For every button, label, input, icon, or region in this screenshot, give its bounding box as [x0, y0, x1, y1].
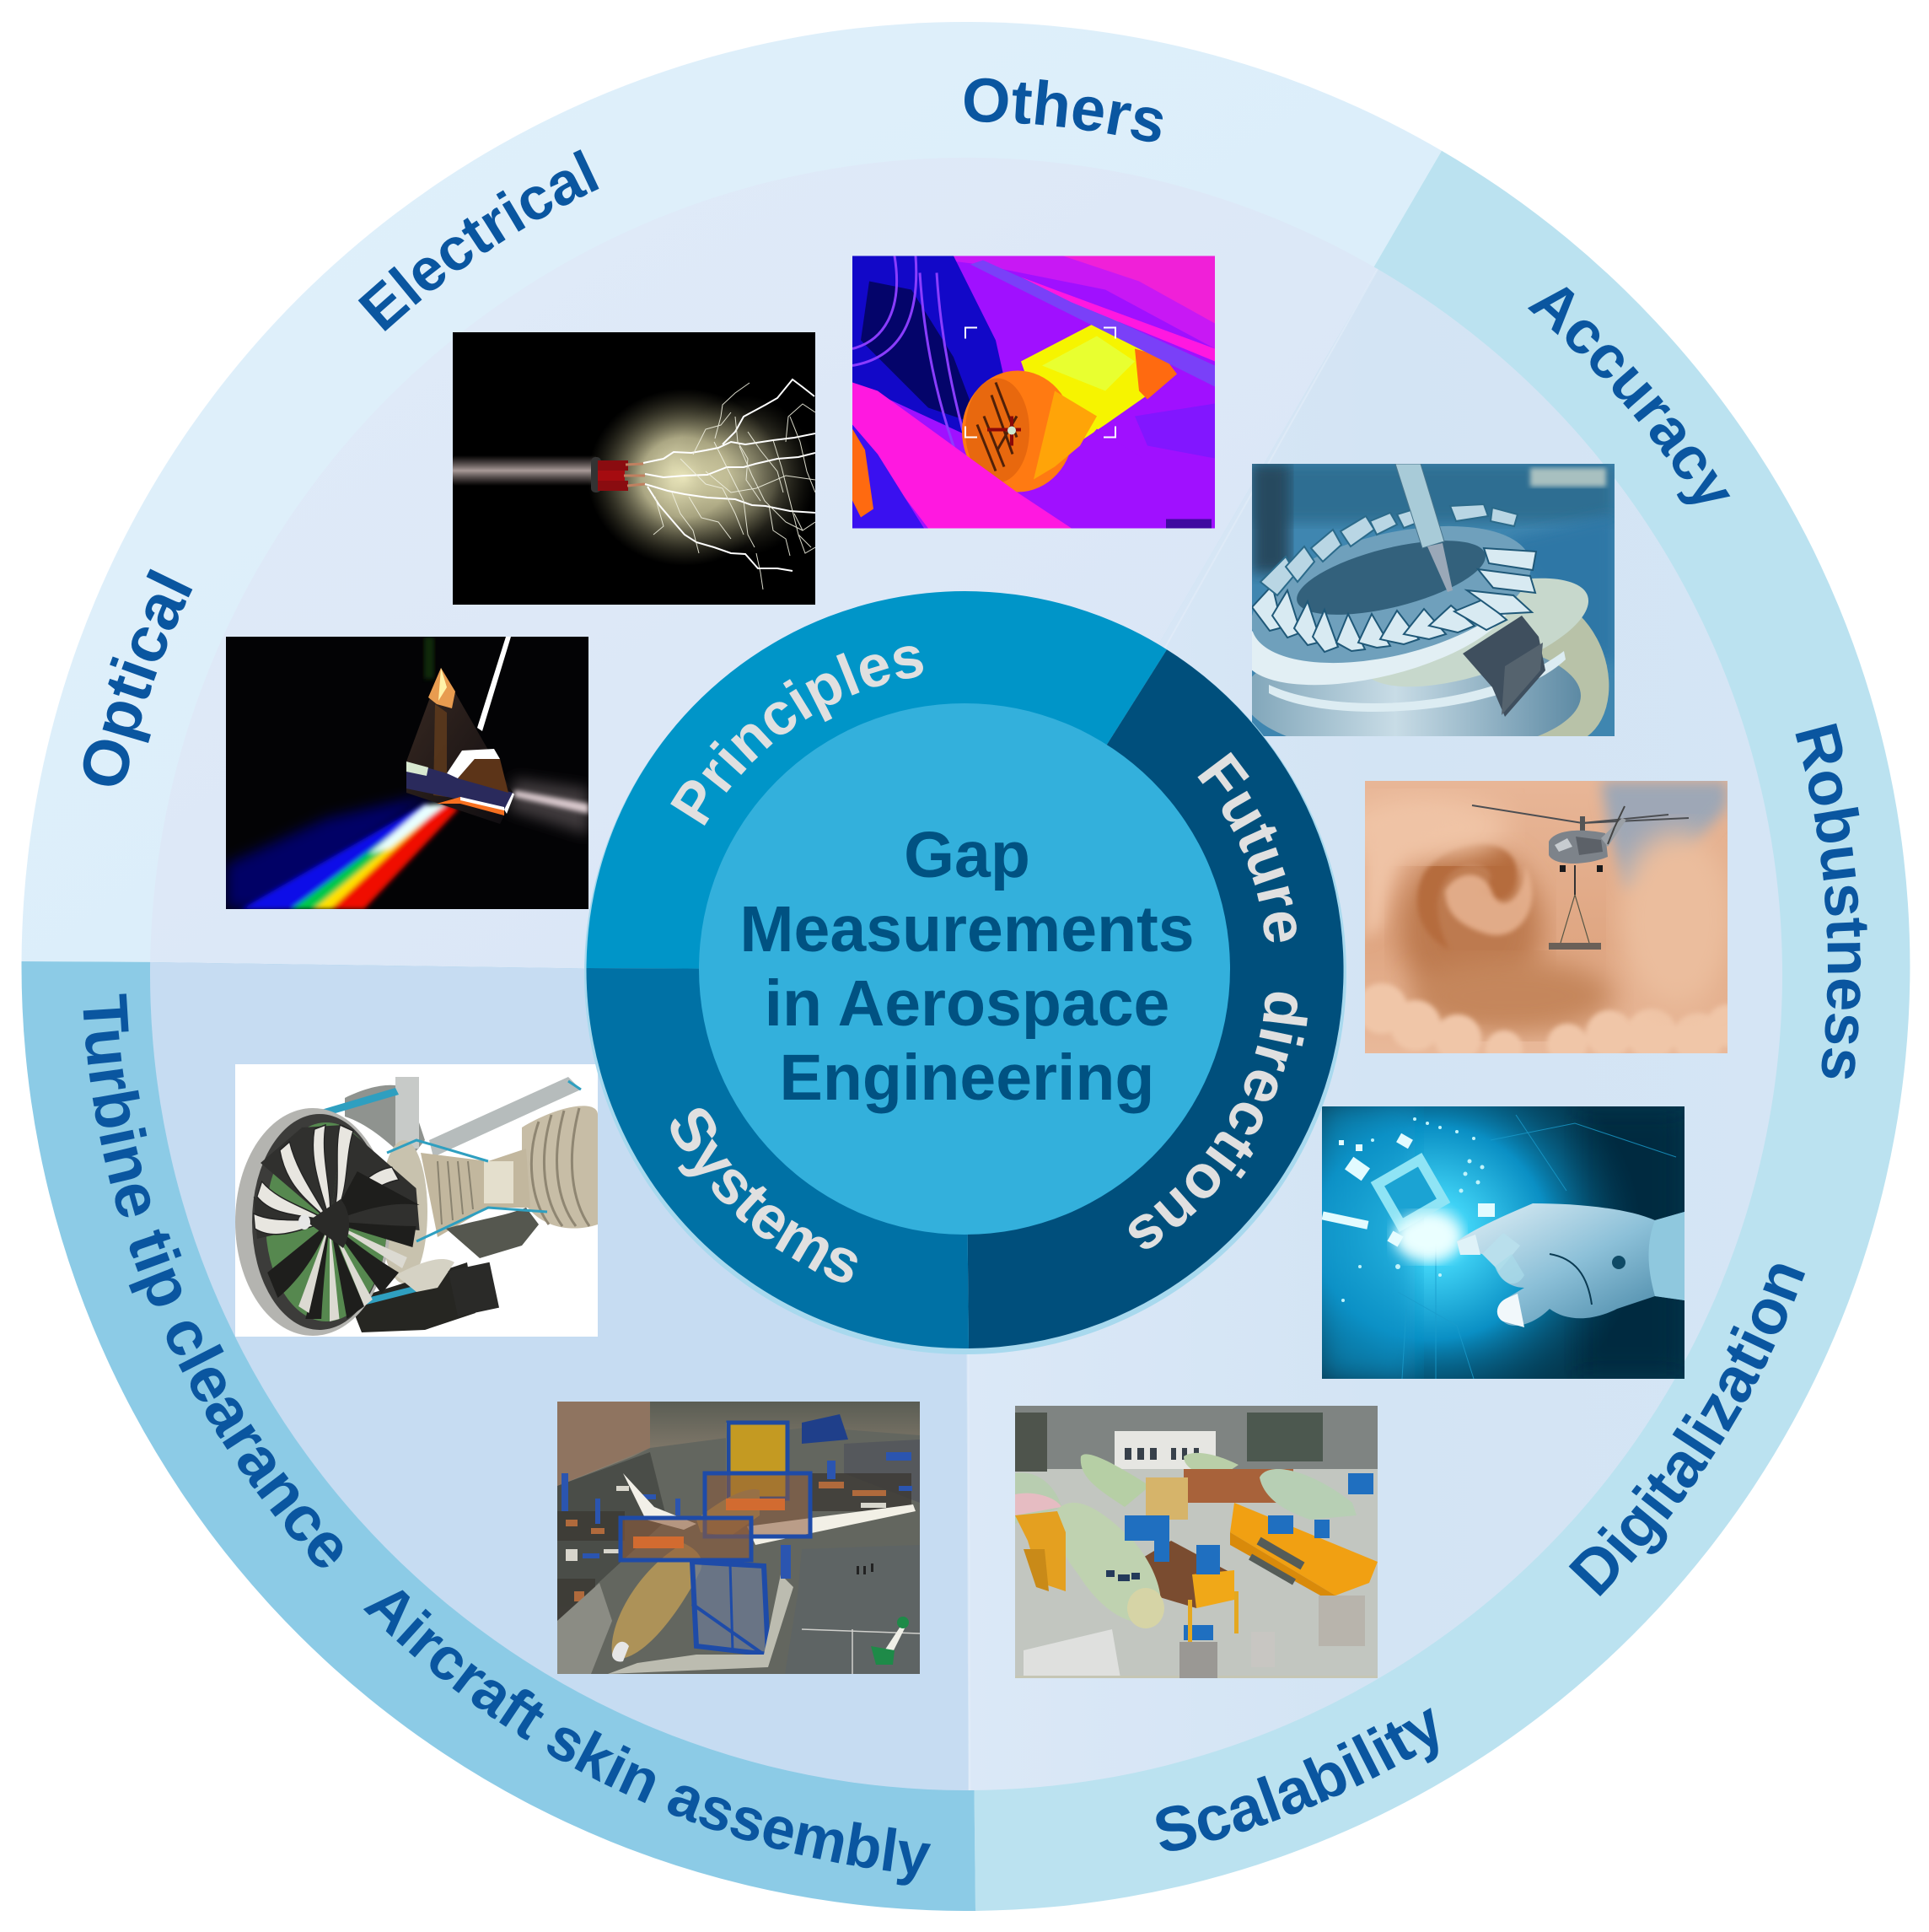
central title: Measurements [739, 893, 1195, 966]
photo: aircraft fuselage assembly hall [1015, 1406, 1378, 1678]
outer label: Scalability: Scalability [1156, 1708, 1438, 1851]
photo: optical prism [226, 637, 588, 909]
photo: helicopter in dust vortex [1365, 781, 1728, 1053]
middle sector: future directions [966, 269, 1782, 1790]
photo: gear inspection [1252, 464, 1615, 736]
outer sector: systems [22, 961, 975, 1911]
middle sector: principles [150, 158, 1378, 974]
central title: in Aerospace [765, 967, 1169, 1040]
panel: middle disc [150, 158, 1782, 1790]
photo: wing and skin assembly hangar [557, 1402, 920, 1674]
photo: thermal image of motor [852, 256, 1215, 528]
central title: Engineering [780, 1041, 1154, 1114]
outer label: Turbine tip clearance: Turbine tip clearance [83, 993, 342, 1568]
outer sector: future directions [966, 151, 1910, 1911]
ring sector: future directions [964, 649, 1344, 1348]
outer label: Optical: Optical [83, 568, 192, 786]
photo: robot hand digital [1322, 1106, 1685, 1379]
central ring [584, 591, 1346, 1354]
central title: Gap [904, 819, 1030, 891]
outer label: Robustness: Robustness [1796, 724, 1867, 1079]
outer label: Digitalization: Digitalization [1568, 1264, 1806, 1596]
middle sector: systems [150, 962, 969, 1790]
central disc [699, 703, 1230, 1235]
outer label: Accuracy: Accuracy [1528, 287, 1730, 504]
outer label: Aircraft skin assembly: Aircraft skin assembly [363, 1590, 931, 1886]
photo: turbofan engine cutaway [235, 1064, 598, 1337]
ring sector: principles [587, 591, 1167, 970]
ring sector: systems [586, 968, 969, 1348]
outer sector: principles [22, 22, 1442, 966]
photo: electrical lightning [453, 332, 815, 605]
ring rim [584, 592, 1346, 1354]
ring label: Future directions: Future directions [1128, 752, 1308, 1249]
outer label: Others: Others [964, 78, 1163, 142]
ring label: Systems: Systems [671, 1108, 857, 1283]
ring label: Principles: Principles [670, 646, 923, 826]
central title [739, 819, 1195, 1114]
outer label: Electrical: Electrical [357, 149, 599, 331]
